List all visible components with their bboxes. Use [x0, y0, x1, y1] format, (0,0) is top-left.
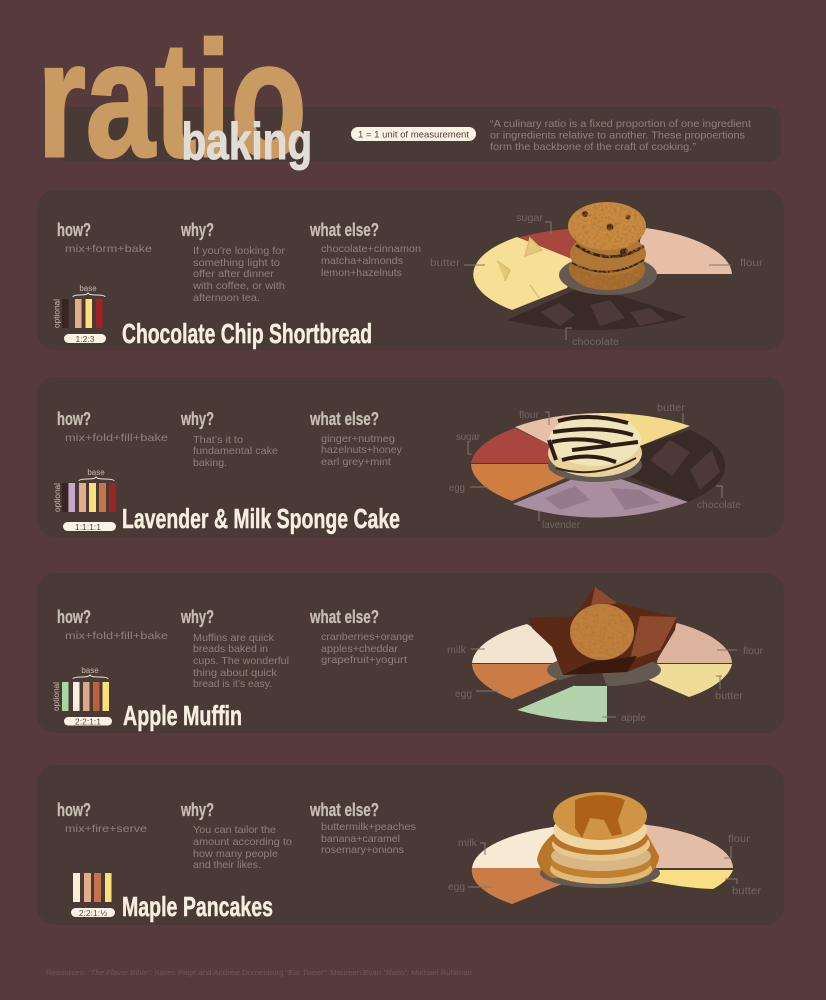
why text — [193, 824, 292, 871]
wedge: egg — [472, 868, 575, 904]
label: chocolate: chocolate — [697, 499, 741, 511]
label: lavender — [539, 510, 580, 531]
label: butter — [430, 257, 485, 269]
label: flour: flour — [519, 409, 539, 421]
recipe title: Apple Muffin — [123, 700, 242, 731]
label: sugar — [456, 431, 480, 454]
why text: If you’re looking for — [193, 245, 286, 257]
wedge: flour — [657, 623, 732, 663]
label: egg: egg — [449, 482, 465, 494]
pie chart: sponge cake ingredients — [449, 402, 741, 531]
variations text — [321, 433, 403, 468]
wedge: butter — [600, 413, 690, 446]
ratio bars — [52, 666, 112, 726]
label: apple: apple — [621, 712, 646, 724]
variations text: apples+cheddar — [321, 643, 399, 655]
why text: breads baked in — [193, 643, 268, 655]
unit legend pill: 1 = 1 unit of measurement — [358, 130, 469, 140]
ratio bars: 2:2:1:1 — [75, 716, 101, 726]
wedge: milk — [472, 826, 570, 868]
heading: what else: what else? — [309, 607, 379, 627]
variations text — [321, 631, 414, 666]
heading: how: how? — [57, 607, 91, 627]
chocolate shading — [650, 440, 720, 490]
lavender shading — [545, 486, 660, 510]
variations text: lemon+hazelnuts — [321, 267, 402, 279]
ratio bars: 1:2:3 — [76, 334, 95, 344]
label: milk — [458, 837, 485, 855]
pie chart: pancake ingredients — [448, 792, 762, 904]
why text: how many people — [193, 848, 278, 860]
label: egg — [448, 881, 492, 893]
label: egg — [455, 688, 499, 700]
heading: why: why? — [180, 409, 214, 429]
title: ratio: ratio — [38, 7, 307, 191]
heading: what else: what else? — [309, 800, 379, 820]
heading: how: how? — [57, 409, 91, 429]
center hub — [547, 654, 661, 686]
label: chocolate — [566, 328, 619, 348]
variations text: cranberries+orange — [321, 631, 414, 643]
heading: why: why? — [180, 607, 214, 627]
why text: with coffee, or with — [192, 280, 285, 292]
definition quote: “A culinary ratio is a fixed proportion of one ingredient — [490, 118, 751, 130]
label: flour: flour — [743, 645, 763, 657]
label: flour — [519, 409, 549, 425]
label: chocolate: chocolate — [572, 336, 619, 348]
label: flour — [724, 833, 751, 858]
label: chocolate — [697, 486, 741, 511]
label: egg: egg — [455, 688, 472, 700]
recipe title: Maple Pancakes — [122, 891, 273, 922]
label: butter — [657, 402, 686, 424]
center hub — [540, 858, 660, 888]
why text: afternoon tea. — [193, 292, 260, 304]
heading: what else: what else? — [309, 409, 379, 429]
wedge: sugar — [517, 228, 600, 259]
wedge: flour — [515, 413, 600, 448]
recipe title: Chocolate Chip Shortbread — [122, 318, 372, 349]
panel: chocolate chip shortbread — [37, 190, 784, 350]
label: butter — [715, 676, 744, 702]
wedge: flour — [640, 824, 733, 868]
center hub — [559, 255, 657, 295]
label: milk: milk — [458, 837, 478, 849]
wedge: lavender — [513, 476, 688, 518]
label: milk: milk — [447, 644, 467, 656]
variations text — [321, 821, 416, 856]
ratio bars: 2:2:1:½ — [79, 908, 107, 918]
variations text: hazelnuts+honey — [321, 444, 403, 456]
why text: That’s it to — [193, 434, 243, 446]
label: lavender: lavender — [542, 519, 580, 531]
label: flour — [709, 257, 764, 269]
subtitle: baking: baking — [182, 112, 312, 170]
icon: cookie stack — [568, 202, 646, 290]
label: milk — [447, 644, 485, 656]
label: sugar — [516, 212, 551, 234]
variations text: rosemary+onions — [321, 844, 404, 856]
unit legend pill — [351, 127, 476, 141]
variations text: ginger+nutmeg — [321, 433, 395, 445]
heading: why: why? — [180, 220, 214, 240]
why text — [193, 434, 278, 469]
why text: something light to — [193, 257, 280, 269]
chocolate shading — [540, 300, 665, 326]
ratio bars: base — [79, 284, 97, 293]
ratio bars: 1:1:1:1 — [75, 522, 101, 532]
variations text: banana+caramel — [321, 833, 400, 845]
why text: Muffins are quick — [193, 632, 275, 644]
definition quote: or ingredients relative to another. These propoertions — [490, 130, 745, 142]
butter shading — [497, 238, 542, 299]
wedge: chocolate — [623, 430, 725, 502]
why text: cups. The wonderful — [193, 655, 289, 667]
method text: mix+fire+serve — [65, 823, 147, 835]
variations text: chocolate+cinnamon — [321, 243, 421, 255]
label: apple — [602, 712, 646, 724]
method text: mix+fold+fill+bake — [65, 432, 168, 444]
heading: how: how? — [57, 220, 91, 240]
why text: fundamental cake — [193, 445, 278, 457]
ratio bars: optional — [53, 483, 62, 512]
recipe title: Lavender & Milk Sponge Cake — [122, 503, 400, 534]
why text: bread is it’s easy. — [193, 678, 272, 690]
wedge: sugar — [471, 428, 560, 463]
wedge: milk — [472, 624, 570, 663]
ratio bars: base — [87, 468, 105, 477]
variations text: buttermilk+peaches — [321, 821, 416, 833]
heading: how: how? — [57, 800, 91, 820]
wedge: butter — [473, 237, 575, 310]
wedge: butter — [637, 870, 733, 889]
ratio bars — [71, 873, 115, 918]
ratio bars — [53, 468, 116, 532]
label: butter: butter — [430, 257, 461, 269]
variations text: earl grey+mint — [321, 456, 391, 468]
label: sugar: sugar — [456, 431, 480, 443]
variations text — [321, 243, 421, 279]
variations text: grapefruit+yogurt — [321, 654, 407, 666]
wedge: egg — [471, 464, 575, 501]
label: butter: butter — [732, 885, 762, 897]
why text: You can tailor the — [193, 824, 276, 836]
icon: muffin in liner — [528, 587, 677, 675]
label: egg — [449, 482, 488, 494]
method text: mix+form+bake — [65, 243, 152, 255]
why text: offer after dinner — [193, 268, 275, 280]
label: egg: egg — [448, 881, 465, 893]
why text — [193, 632, 289, 690]
label: butter — [725, 879, 762, 897]
wedge: apple — [517, 684, 607, 722]
why text — [192, 245, 286, 304]
footer: resources: Resources: “The Flavor Bible”: Karen Page and Andrew Dornenburg “Eat Tweet”: Maureen Evan “Ratio”: Michael Ruhlman — [46, 968, 472, 977]
variations text: matcha+almonds — [321, 255, 403, 267]
label: butter: butter — [657, 402, 686, 414]
label: butter: butter — [715, 690, 744, 702]
ratio bars: optional — [52, 682, 61, 711]
panel: maple pancakes — [37, 765, 784, 925]
why text: baking. — [193, 457, 227, 469]
pie chart: shortbread ingredients — [430, 202, 764, 348]
label: flour — [717, 645, 763, 657]
heading: what else: what else? — [309, 220, 379, 240]
why text: amount according to — [193, 836, 292, 848]
icon: pancake stack with syrup — [537, 792, 659, 884]
header bar — [58, 107, 781, 162]
icon: glazed cake — [548, 414, 642, 477]
method text: mix+fold+fill+bake — [65, 630, 168, 642]
ratio bars — [52, 284, 106, 344]
ratio bars: base — [81, 666, 99, 675]
why text: thing about quick — [193, 667, 278, 679]
pie chart: muffin ingredients — [447, 587, 763, 724]
ratio bars: optional — [52, 299, 62, 328]
label: flour: flour — [728, 833, 751, 845]
wedge: flour — [640, 228, 732, 274]
label: flour: flour — [740, 257, 764, 269]
why text: and their likes. — [193, 859, 261, 871]
wedge: egg — [472, 664, 567, 699]
center hub — [548, 448, 642, 482]
panel: lavender and milk sponge cake — [37, 377, 784, 537]
panel: apple muffin — [37, 573, 784, 733]
heading: why: why? — [180, 800, 214, 820]
label: sugar: sugar — [516, 212, 544, 224]
definition quote — [490, 118, 751, 153]
wedge: chocolate — [507, 290, 687, 330]
definition quote: form the backbone of the craft of cooking.” — [490, 141, 697, 153]
wedge: butter — [647, 664, 732, 697]
